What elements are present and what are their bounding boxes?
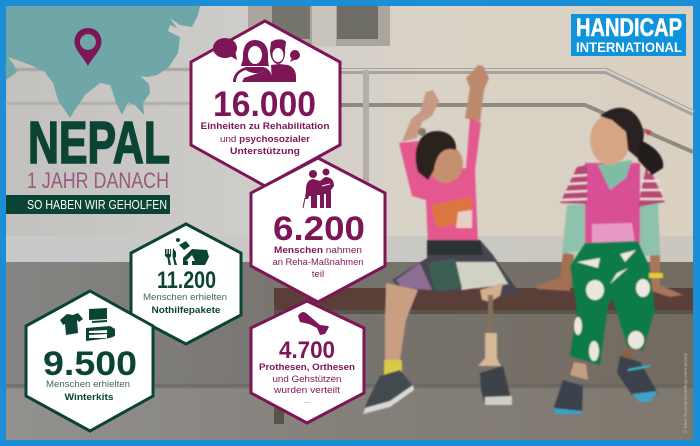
title: Nepal: NEPAL	[28, 110, 170, 176]
metal handrails	[340, 70, 693, 238]
description: Prothesen, Orthesen	[259, 362, 355, 373]
description: Menschen nahmen	[274, 245, 362, 256]
description: Nothilfepakete	[152, 305, 220, 316]
icon: cutlery, kit and shelter	[165, 238, 209, 265]
description: teil	[312, 269, 324, 280]
logo: Handicap International: INTERNATIONAL	[576, 39, 682, 55]
description: Einheiten zu Rehabilitation	[200, 121, 330, 132]
description: Winterkits	[64, 392, 114, 403]
number: 4.700	[279, 337, 335, 364]
description: wurden verteilt	[273, 385, 340, 396]
bench	[274, 288, 693, 424]
copyright credit: © Eliott Touvenin/Handicap International	[682, 353, 688, 433]
description: Menschen erhielten	[46, 379, 130, 390]
panel: 9.500 winter kits	[26, 291, 153, 431]
icon: t-shirt, blanket and sleeping bag	[60, 308, 115, 341]
icon: elderly person with helper	[303, 168, 334, 208]
photo: girl on the right in green trousers	[537, 108, 683, 414]
description: ...	[304, 398, 310, 405]
map of Asia	[6, 6, 200, 118]
description: und psychosozialer	[220, 134, 310, 145]
panel: 11.200 emergency kits	[131, 224, 241, 344]
description: Unterstützung	[230, 146, 300, 157]
photo: girl on the left with prosthetic leg	[363, 65, 520, 414]
description	[143, 292, 227, 316]
description: Menschen erhielten	[143, 292, 227, 303]
banner: So haben wir geholfen: SO HABEN WIR GEHOLFEN	[27, 198, 167, 212]
icon: prosthetic leg	[298, 312, 329, 335]
subtitle: 1 Jahr danach: 1 JAHR DANACH	[27, 168, 169, 193]
description: und Gehstützen	[272, 374, 342, 385]
logo: Handicap International	[571, 14, 686, 56]
number: 16.000	[213, 85, 316, 124]
description	[200, 121, 330, 157]
number: 11.200	[157, 267, 216, 294]
window in the background	[248, 6, 390, 46]
description: an Reha-Maßnahmen	[272, 257, 364, 268]
number: 9.500	[43, 345, 137, 383]
number: 6.200	[273, 210, 365, 248]
description	[272, 245, 364, 280]
banner: So haben wir geholfen	[6, 195, 170, 214]
panel: 16.000 rehabilitation units	[191, 21, 340, 186]
icon: map pin	[74, 28, 102, 66]
panel: 6.200 people in rehab	[251, 158, 385, 302]
description	[46, 379, 130, 403]
icon: two people with speech bubbles	[213, 38, 300, 82]
description	[259, 362, 355, 405]
panel: 4.700 prostheses	[251, 301, 364, 423]
